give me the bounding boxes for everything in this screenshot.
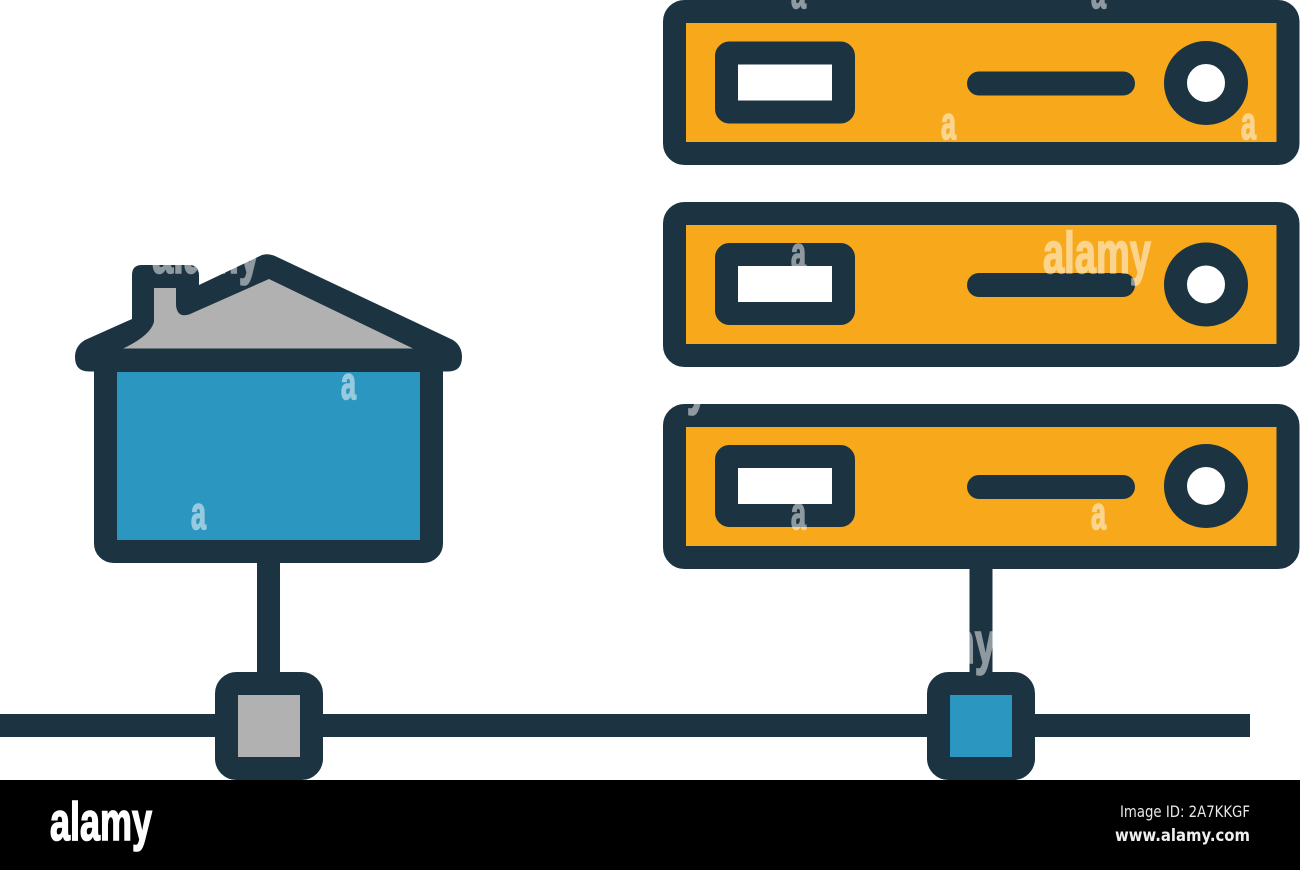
node: server junction [938,684,1024,768]
icon: server unit 1 [674,12,1288,154]
house roof outline [75,254,462,372]
power button [1176,456,1236,516]
footer logo: alamy [50,792,152,852]
watermarks: a [941,97,956,149]
image id: Image ID: 2A7KKGF [1120,802,1250,821]
watermarks: alamy [1043,221,1151,286]
server case [674,12,1288,154]
node: house junction [226,684,312,768]
drive slot [726,254,844,314]
house body [106,360,432,552]
watermarks: a [791,487,806,539]
connector: house to network [257,555,280,675]
server case [674,214,1288,356]
watermarks: a [341,357,356,409]
watermarks: alamy [600,351,708,416]
power button [1176,254,1236,315]
watermarks: a [791,227,806,279]
drive slot [726,53,844,112]
watermarks [152,0,1256,676]
watermarks: a [1091,487,1106,539]
watermarks: alamy [152,221,260,286]
connector: servers to network [970,560,992,675]
icon: server unit 2 [674,214,1288,356]
website: www.alamy.com [1115,826,1250,845]
icon: house [75,254,462,551]
status bar [967,475,1135,499]
icon: server unit 3 [674,416,1288,558]
drive slot [726,456,844,516]
status bar [967,273,1135,297]
power button [1176,52,1236,114]
network line [0,714,1250,737]
watermarks: a [1241,97,1256,149]
server case [674,416,1288,558]
watermarks: alamy [888,611,996,676]
watermarks: a [191,487,206,539]
status bar [967,72,1135,96]
footer bar [0,780,1300,870]
house roof fill [123,279,413,348]
